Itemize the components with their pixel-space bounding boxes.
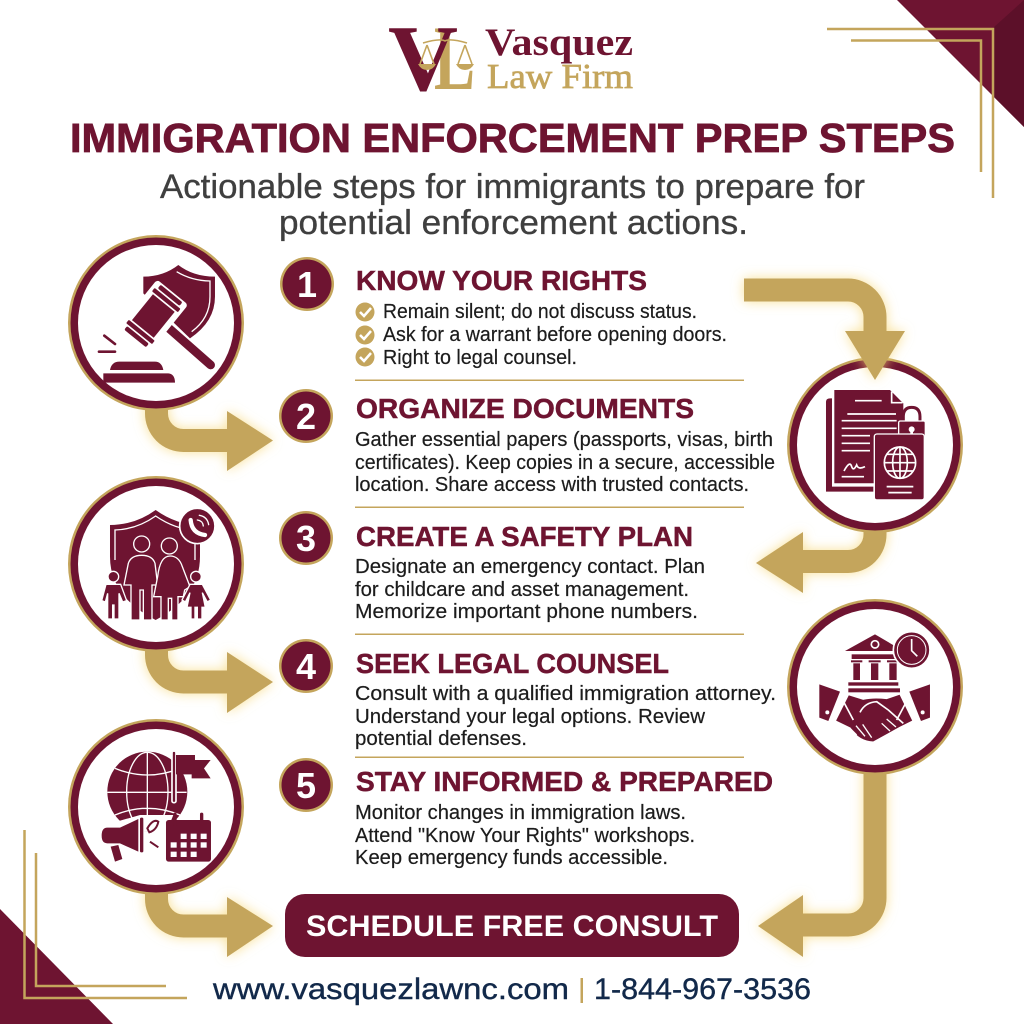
step 5 body [355, 802, 695, 869]
step 2 number badge [279, 389, 333, 443]
step 4 heading: SEEK LEGAL COUNSEL [356, 648, 669, 679]
icon circle: globe, megaphone and calendar [68, 719, 244, 895]
corner decoration: top right [827, 0, 1024, 198]
step 2 body: Gather essential papers (passports, visas, birth [355, 429, 773, 451]
title: IMMIGRATION ENFORCEMENT PREP STEPS [70, 115, 955, 161]
logo: Vasquez [485, 21, 633, 64]
step 2 number badge: 2 [296, 396, 316, 437]
icon circle: documents, lock and passport [787, 357, 963, 533]
call to action button [285, 894, 739, 957]
icon circle: family with shield and phone [68, 476, 244, 652]
step 5 number badge [279, 758, 333, 812]
step 3 body: Memorize important phone numbers. [355, 601, 698, 623]
step 2 heading: ORGANIZE DOCUMENTS [356, 393, 694, 424]
footer contact line: www.vasquezlawnc.com [212, 973, 569, 1006]
step 5 heading: STAY INFORMED & PREPARED [356, 766, 773, 797]
logo [388, 7, 633, 111]
step 3 body: Designate an emergency contact. Plan [355, 556, 705, 578]
icon circle: gavel and shield [68, 235, 244, 411]
step 3 body [355, 556, 705, 623]
step 5 body: Monitor changes in immigration laws. [355, 802, 686, 824]
step 1 checklist: Remain silent; do not discuss status. [383, 301, 697, 323]
arrow: handshake circle to consult button [758, 765, 875, 957]
logo: V [388, 7, 458, 111]
step 1: know your rights [280, 257, 727, 369]
step 3 body: for childcare and asset management. [355, 579, 689, 601]
step 4 number badge [279, 639, 333, 693]
arrow: circle 3 to step 4 [156, 640, 273, 713]
step 5 body: Keep emergency funds accessible. [355, 847, 668, 869]
step 1 checklist: Right to legal counsel. [383, 347, 577, 369]
logo: L [434, 7, 475, 109]
step 3 number badge [279, 511, 333, 565]
step 1 number badge [280, 257, 334, 311]
step 5: stay informed and prepared [279, 758, 773, 869]
step 4 body: Consult with a qualified immigration attorney. [355, 683, 776, 705]
arrow: circle 1 to step 2 [156, 400, 273, 471]
step 2 body [355, 429, 775, 496]
icon circle: courthouse, clock and handshake [787, 599, 963, 775]
step 4 body: Understand your legal options. Review [355, 706, 706, 728]
arrow: document circle to step 3 [756, 520, 875, 593]
step 4: seek legal counsel [279, 639, 776, 750]
step 2 body: certificates). Keep copies in a secure, accessible [355, 452, 775, 474]
call to action button: SCHEDULE FREE CONSULT [306, 910, 718, 943]
step 1 checklist: Ask for a warrant before opening doors. [383, 324, 727, 346]
step 4 body: potential defenses. [355, 728, 527, 750]
step 3: create a safety plan [279, 511, 705, 623]
step 4 body [355, 683, 776, 750]
step 1 checklist [356, 301, 727, 369]
step 3 heading: CREATE A SAFETY PLAN [356, 521, 693, 552]
arrow: step 1 to document circle [744, 290, 905, 380]
step 1 heading: KNOW YOUR RIGHTS [356, 265, 647, 296]
step 2: organize documents [279, 389, 775, 496]
subtitle [160, 168, 865, 242]
corner decoration: bottom left [0, 830, 187, 1024]
step 4 number badge: 4 [296, 646, 316, 687]
subtitle: Actionable steps for immigrants to prepare for [160, 168, 865, 206]
step 5 body: Attend "Know Your Rights" workshops. [355, 825, 695, 847]
footer contact line: 1-844-967-3536 [594, 973, 811, 1006]
step 1 number badge: 1 [297, 264, 317, 305]
step 2 body: location. Share access with trusted contacts. [355, 474, 749, 496]
step 3 number badge: 3 [296, 518, 316, 559]
logo: Law Firm [487, 57, 633, 96]
arrow: circle 5 to consult button [156, 885, 273, 957]
subtitle: potential enforcement actions. [279, 204, 748, 242]
step 5 number badge: 5 [296, 765, 316, 806]
footer contact line [212, 973, 811, 1006]
